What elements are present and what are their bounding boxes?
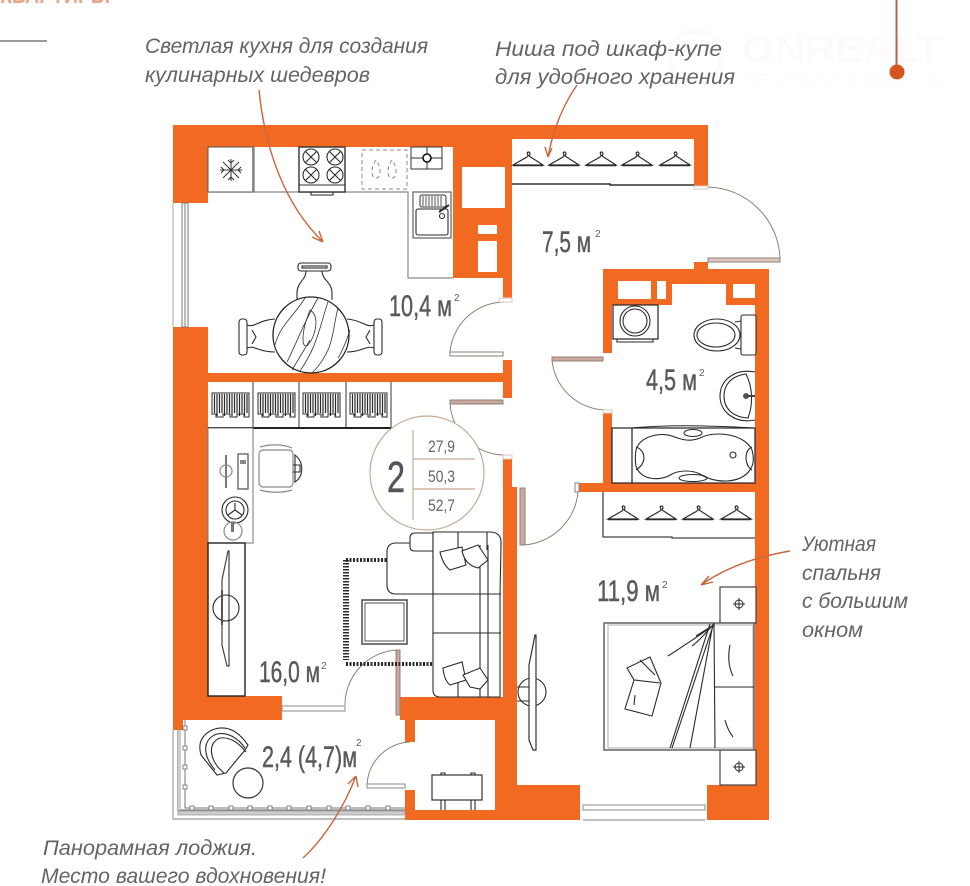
- apartment info circle: 27,9: [428, 437, 455, 456]
- area label: bedroom: 2: [662, 580, 668, 591]
- pillow on bed: [625, 657, 661, 716]
- fridge: [208, 147, 254, 192]
- area label: bedroom: 11,9 м: [597, 575, 660, 608]
- annotation: bedroom: [701, 533, 908, 642]
- apartment info circle: [370, 416, 484, 530]
- stove: [299, 147, 345, 195]
- loggia frame: [173, 720, 405, 819]
- nightstands: [720, 587, 756, 785]
- counter outline: [208, 192, 453, 278]
- loggia pouf: [233, 768, 263, 798]
- bathroom fixtures: [612, 305, 756, 483]
- living room wardrobe: [208, 382, 391, 428]
- area label: living room: 16,0 м: [259, 656, 320, 689]
- annotation: storage niche: [495, 38, 735, 157]
- annotation: loggia: Панорамная лоджия.: [43, 837, 257, 860]
- watermark: НЕДВИЖИМОСТЬ: [745, 72, 940, 87]
- kitchen window: [173, 203, 208, 327]
- annotation: bedroom: окном: [802, 619, 863, 642]
- annotation: bedroom: Уютная: [801, 533, 876, 556]
- chair top: [297, 263, 332, 300]
- closet with hangers: hall: [512, 152, 694, 185]
- hob: [411, 147, 442, 169]
- doors: [282, 186, 780, 788]
- apartment info circle: 52,7: [428, 496, 455, 515]
- annotation: storage niche: Ниша под шкаф-купе: [495, 38, 722, 61]
- round table: [273, 297, 350, 373]
- desk with chair and lamp: [208, 428, 302, 543]
- annotation: bedroom: спальня: [802, 562, 881, 585]
- annotation: kitchen: Светлая кухня для создания: [145, 35, 428, 58]
- annotation: kitchen: [145, 35, 428, 242]
- apartment info circle: 50,3: [428, 467, 455, 486]
- cropped heading at top-left: [0, 0, 110, 42]
- loggia armchair: [200, 728, 248, 775]
- area label: bathroom: 4,5 м: [646, 364, 697, 397]
- area label: living room: 2: [321, 661, 327, 672]
- apartment info circle: 2: [387, 453, 405, 502]
- washbasin: [720, 371, 755, 421]
- shaft cut-outs: [462, 167, 755, 299]
- storage table: [432, 773, 482, 810]
- office chair: [259, 445, 302, 492]
- TV unit in living room: [208, 543, 245, 696]
- sink: [413, 192, 451, 238]
- pillows: [440, 547, 466, 570]
- bedroom window: [580, 785, 707, 820]
- annotation: kitchen: кулинарных шедевров: [145, 64, 370, 87]
- area label: loggia: 2: [356, 738, 362, 749]
- area label: kitchen: 2: [454, 293, 460, 304]
- watermark: ONREALT: [742, 29, 942, 71]
- bedroom wardrobe: [603, 492, 755, 538]
- area label: hall: 7,5 м: [542, 226, 591, 259]
- sofa: [387, 532, 501, 697]
- top-right pin line with dot: [890, 0, 904, 80]
- area label: kitchen: 10,4 м: [389, 290, 452, 323]
- area label: bathroom: 2: [699, 368, 705, 379]
- coffee table: [362, 600, 407, 644]
- chair left: [239, 319, 275, 355]
- bedroom TV: [517, 635, 546, 750]
- area label: loggia: 2,4 (4,7)м: [262, 741, 357, 774]
- annotation: storage niche: для удобного хранения: [495, 66, 735, 89]
- hood dashed: [362, 150, 407, 189]
- watermark: [669, 29, 942, 87]
- carpet: [346, 560, 433, 664]
- bed: [604, 623, 754, 750]
- bathtub: [612, 426, 755, 483]
- annotation: loggia: [41, 776, 358, 886]
- kitchen furniture: [208, 147, 453, 373]
- chair right: [347, 319, 382, 355]
- toilet: [694, 315, 756, 355]
- annotation: bedroom: с большим: [802, 590, 908, 613]
- area label: hall: 2: [595, 229, 601, 240]
- washing machine: [613, 305, 658, 342]
- orange walls: [173, 125, 769, 820]
